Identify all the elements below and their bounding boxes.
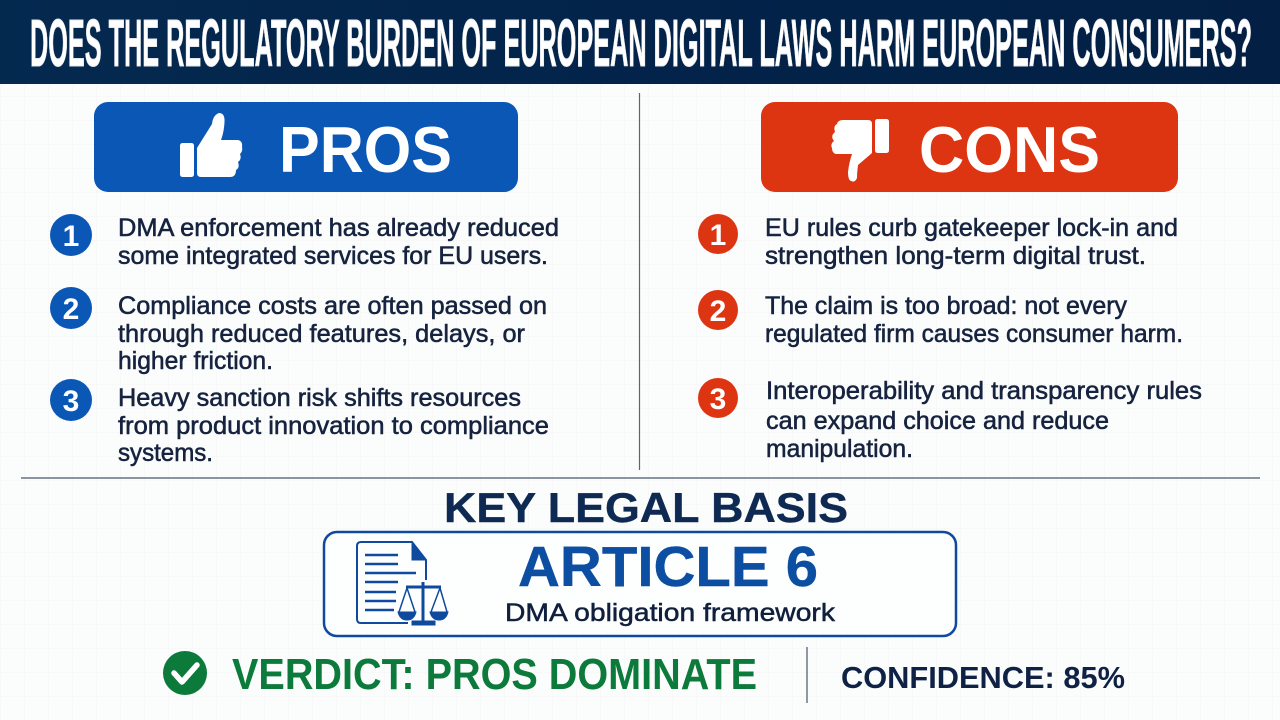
pro item 2: higher friction. (118, 347, 273, 375)
con item 1: strengthen long-term digital trust. (765, 242, 1146, 270)
heading: key legal basis: KEY LEGAL BASIS (444, 484, 848, 531)
panel: article 6 (324, 532, 956, 636)
verdict text: VERDICT: PROS DOMINATE (232, 650, 757, 699)
con item 1: 1 (710, 219, 726, 252)
con item 3: manipulation. (766, 435, 913, 463)
cons label: CONS (919, 113, 1100, 186)
icon: check circle (163, 651, 207, 695)
pro item 1: 1 (63, 220, 79, 253)
con item 2: The claim is too broad: not every (765, 292, 1127, 320)
icon: thumbs up (180, 113, 242, 177)
pro item 3: Heavy sanction risk shifts resources (118, 384, 521, 412)
con item 2 (698, 290, 1183, 348)
con item 3: Interoperability and transparency rules (766, 377, 1202, 405)
pro item 2: 2 (63, 293, 79, 326)
panel: cons (698, 102, 1202, 463)
con item 3: can expand choice and reduce (766, 407, 1109, 435)
con item 3: 3 (710, 383, 726, 416)
title banner (0, 0, 1280, 84)
con item 2: 2 (710, 295, 726, 328)
pro item 1 (50, 214, 559, 270)
article number: ARTICLE 6 (518, 535, 818, 599)
confidence: CONFIDENCE: 85% (841, 660, 1125, 695)
pro item 1: DMA enforcement has already reduced (118, 214, 559, 242)
panel: pros (50, 102, 559, 467)
icon: document with scales (357, 542, 448, 625)
pro item 2 (50, 287, 547, 375)
con item 1 (698, 214, 1178, 270)
cons header (761, 102, 1178, 192)
con item 1: EU rules curb gatekeeper lock-in and (765, 214, 1178, 242)
pro item 3: 3 (63, 385, 79, 418)
verdict (163, 650, 757, 699)
article caption: DMA obligation framework (505, 599, 836, 627)
pros header (94, 102, 518, 192)
icon: thumbs down (831, 119, 889, 182)
pro item 1: some integrated services for EU users. (118, 242, 548, 270)
pro item 2: through reduced features, delays, or (118, 320, 525, 348)
pro item 3: systems. (118, 439, 213, 467)
pros label: PROS (279, 113, 452, 186)
con item 2: regulated firm causes consumer harm. (765, 320, 1183, 348)
pro item 3 (50, 379, 549, 467)
con item 3 (698, 377, 1202, 463)
pro item 2: Compliance costs are often passed on (118, 292, 547, 320)
pro item 3: from product innovation to compliance (118, 412, 549, 440)
